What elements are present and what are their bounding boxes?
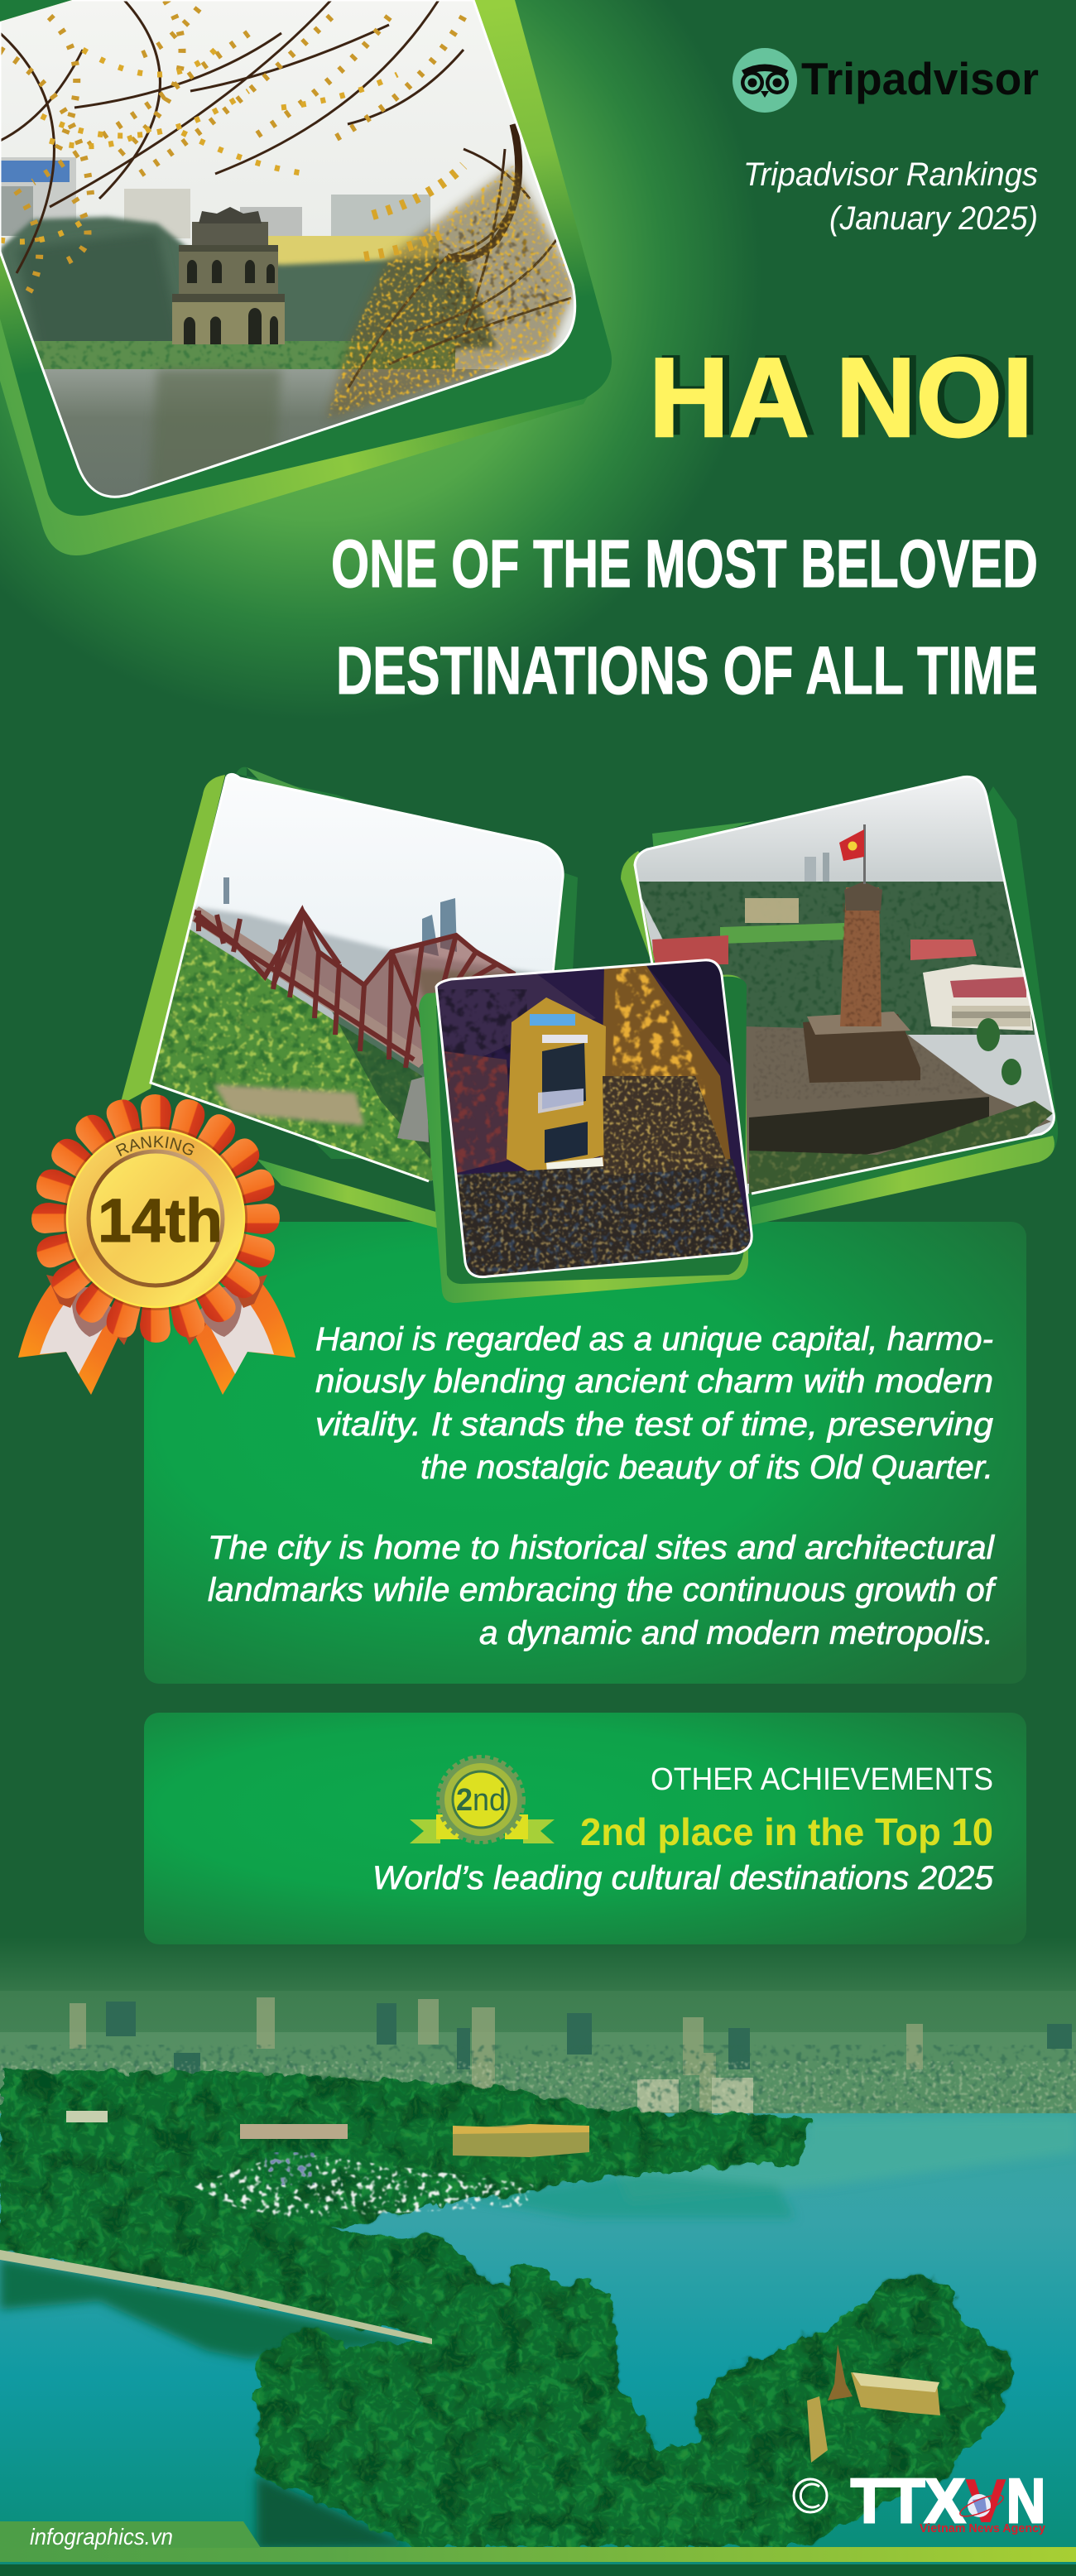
text: other achievements: OTHER ACHIEVEMENTS xyxy=(651,1762,993,1797)
shoreline buildings and boats xyxy=(66,2111,589,2218)
logo: Tripadvisor: Tripadvisor xyxy=(801,53,1039,104)
icon: owl xyxy=(733,48,797,113)
text: other achievements xyxy=(372,1762,994,1896)
title: HA NOI: HA NOI xyxy=(656,332,1040,458)
text block: description xyxy=(208,1321,997,1651)
hero photo frame: Hoan Kiem Lake xyxy=(0,0,612,555)
subheading: rankings date: Tripadvisor Rankings xyxy=(743,156,1038,193)
photo: Long Bien Bridge xyxy=(141,770,571,1192)
text block: description: landmarks while embracing the continuous growth of xyxy=(208,1572,997,1608)
lake water xyxy=(0,2113,1076,2552)
logo: TTXVN copyright: TTX xyxy=(851,2466,965,2535)
text block: description: the nostalgic beauty of its Old Quarter. xyxy=(420,1449,993,1486)
subheading: rankings date xyxy=(743,156,1038,237)
ranking medal: 14th: RANKING xyxy=(116,1136,195,1156)
photo: Flag Tower xyxy=(629,770,1068,1200)
island pagoda xyxy=(807,2344,940,2463)
footer bar: infographics.vn xyxy=(30,2524,173,2550)
ranking medal: 14th: 14th xyxy=(98,1186,223,1255)
subheading: rankings date: (January 2025) xyxy=(829,200,1038,237)
Turtle Tower xyxy=(172,207,285,344)
text block: description: Hanoi is regarded as a unique capital, harmo- xyxy=(315,1321,993,1358)
photo group: Flag Tower frame xyxy=(621,770,1068,1225)
logo: Tripadvisor xyxy=(733,48,1039,113)
heading: one of the most beloved destinations xyxy=(331,526,1038,709)
text block: description: vitality. It stands the test of time, preserving xyxy=(315,1406,993,1443)
text block: description: a dynamic and modern metropolis. xyxy=(479,1615,993,1651)
icon: Vietnamese flag xyxy=(839,829,864,861)
footer bar xyxy=(0,2521,1076,2576)
logo: TTXVN copyright: N xyxy=(1006,2466,1045,2535)
photo group: Old Quarter at night frame xyxy=(419,956,757,1303)
photo: Turtle Tower on the lake xyxy=(0,0,596,513)
logo: TTXVN copyright: V xyxy=(965,2466,1006,2535)
photo group: Long Bien Bridge frame xyxy=(120,767,578,1228)
photo: Old Quarter street at night xyxy=(430,956,757,1283)
branches and leaves xyxy=(0,0,577,418)
text: other achievements: 2nd place in the Top 10 xyxy=(580,1810,993,1853)
icon: 2nd place badge xyxy=(410,1758,555,1843)
icon: 2nd place badge: 2nd xyxy=(456,1783,506,1818)
text: other achievements: World’s leading cultural destinations 2025 xyxy=(372,1860,994,1896)
logo: TTXVN copyright: Vietnam News Agency xyxy=(920,2521,1046,2535)
logo: TTXVN copyright xyxy=(794,2466,1046,2535)
ribbon tails xyxy=(18,1275,295,1395)
title: HA NOI: HA NOI xyxy=(649,334,1033,460)
photo: West Lake aerial view xyxy=(0,1991,1076,2552)
causeway xyxy=(0,2250,432,2344)
skyline xyxy=(0,1997,1076,2131)
icon: copyright xyxy=(794,2479,827,2512)
icon: globe xyxy=(958,2491,1006,2521)
ranking medal: 14th xyxy=(18,1094,295,1395)
panel: other achievements xyxy=(144,1713,1026,1944)
rosette petals xyxy=(31,1094,280,1343)
text block: description: The city is home to historical sites and architectural xyxy=(208,1530,995,1566)
panel: description xyxy=(144,1222,1026,1684)
forest and islands xyxy=(0,2069,1013,2547)
text block: description: niously blending ancient charm with modern xyxy=(315,1363,993,1400)
